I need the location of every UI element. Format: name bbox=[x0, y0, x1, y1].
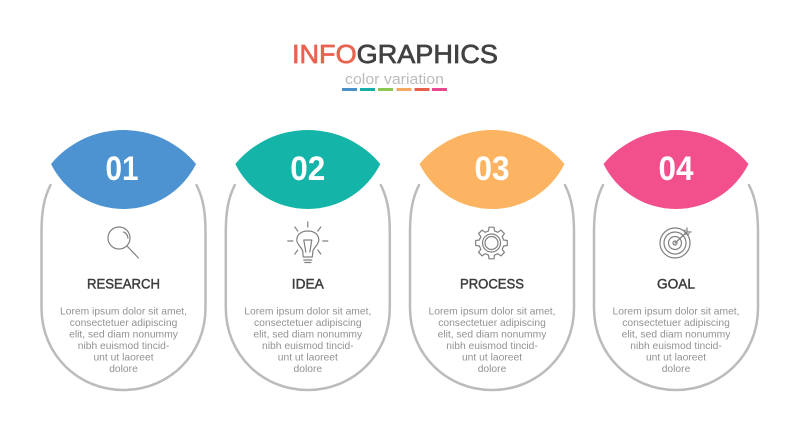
title: INFOGRAPHICS bbox=[292, 39, 498, 69]
icon: light bulb bbox=[288, 222, 328, 262]
body text: consectetuer adipiscing bbox=[438, 318, 546, 329]
colour swatches bbox=[342, 88, 447, 91]
body text: consectetuer adipiscing bbox=[70, 318, 178, 329]
number: 03 bbox=[474, 150, 510, 188]
body text: nibh euismod tincid- bbox=[262, 341, 354, 352]
body text: dolore bbox=[293, 364, 322, 375]
number badge bbox=[420, 130, 564, 209]
icon: magnifier bbox=[108, 227, 138, 258]
panel: process bbox=[410, 130, 574, 390]
card outline bbox=[42, 185, 206, 390]
heading: IDEA bbox=[292, 276, 324, 292]
icon: gear bbox=[476, 227, 507, 259]
panel: research bbox=[42, 130, 206, 390]
body text: consectetuer adipiscing bbox=[254, 318, 362, 329]
body text: unt ut laoreet bbox=[278, 352, 338, 364]
body text: Lorem ipsum dolor sit amet, bbox=[612, 306, 740, 318]
body text: Lorem ipsum dolor sit amet, bbox=[428, 306, 556, 318]
subtitle: color variation bbox=[345, 71, 444, 88]
body text: dolore bbox=[478, 364, 507, 375]
body text: elit, sed diam nonummy bbox=[438, 330, 547, 340]
body text: nibh euismod tincid- bbox=[630, 341, 722, 352]
body text: unt ut laoreet bbox=[646, 352, 706, 364]
body text: dolore bbox=[109, 364, 138, 375]
number: 02 bbox=[290, 150, 325, 188]
body text: Lorem ipsum dolor sit amet, bbox=[60, 306, 187, 318]
heading: PROCESS bbox=[460, 276, 524, 292]
body text: dolore bbox=[662, 364, 691, 375]
body text: elit, sed diam nonummy bbox=[69, 330, 179, 340]
body text: consectetuer adipiscing bbox=[622, 318, 730, 329]
body text: elit, sed diam nonummy bbox=[622, 330, 731, 340]
panel: goal bbox=[594, 130, 758, 390]
body text: unt ut laoreet bbox=[462, 352, 522, 364]
card outline bbox=[226, 185, 390, 390]
body text: nibh euismod tincid- bbox=[78, 341, 169, 352]
number badge bbox=[604, 130, 748, 209]
number: 01 bbox=[106, 150, 138, 188]
panel: idea bbox=[226, 130, 390, 390]
number: 04 bbox=[658, 150, 694, 188]
body text: unt ut laoreet bbox=[93, 352, 154, 364]
number badge bbox=[235, 130, 380, 209]
heading: GOAL bbox=[657, 276, 695, 292]
heading: RESEARCH bbox=[87, 276, 160, 292]
card outline bbox=[410, 185, 574, 390]
icon: target bbox=[660, 228, 691, 258]
body text: nibh euismod tincid- bbox=[446, 341, 538, 352]
number badge bbox=[51, 130, 196, 209]
body text: elit, sed diam nonummy bbox=[253, 330, 363, 340]
body text: Lorem ipsum dolor sit amet, bbox=[244, 306, 371, 318]
card outline bbox=[594, 185, 758, 390]
